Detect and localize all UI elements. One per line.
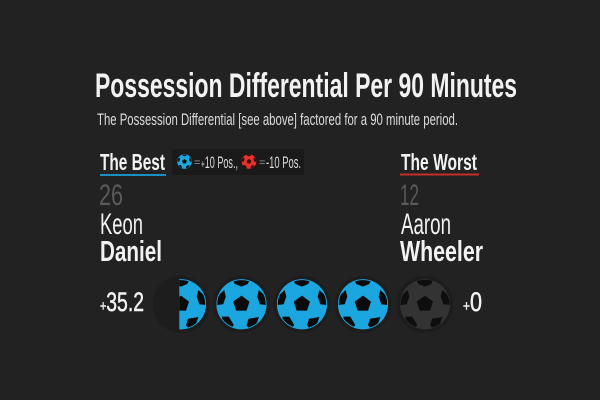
player: worst: 12 [400, 179, 419, 212]
heading: the best [100, 149, 166, 176]
heading: the worst [400, 149, 479, 176]
player: best: Keon [100, 208, 143, 241]
icon: red ball legend [242, 154, 256, 169]
icon: full ball 4 [334, 276, 392, 333]
icon: full ball 2 [213, 276, 270, 333]
player: best: Daniel [100, 236, 162, 268]
legend: -10 Pos. [266, 153, 301, 172]
icon: empty ball [400, 280, 450, 329]
player: worst [400, 179, 483, 268]
player: worst: Wheeler [400, 236, 483, 268]
player: best: 26 [99, 179, 123, 212]
legend [172, 149, 304, 175]
icon: blue ball legend [177, 154, 192, 169]
player: worst: Aaron [401, 208, 451, 241]
ball row [179, 279, 450, 330]
heading: the best: The Best [100, 149, 165, 175]
legend: +10 Pos., [201, 153, 238, 172]
legend: = [259, 157, 265, 169]
heading: the worst: The Worst [401, 149, 477, 175]
value: worst: +0 [463, 287, 482, 317]
icon: partial ball [179, 279, 206, 330]
player: best [99, 179, 162, 268]
icon: full ball 3 [274, 276, 330, 333]
value: best: +35.2 [100, 287, 144, 317]
legend: = [194, 157, 200, 169]
